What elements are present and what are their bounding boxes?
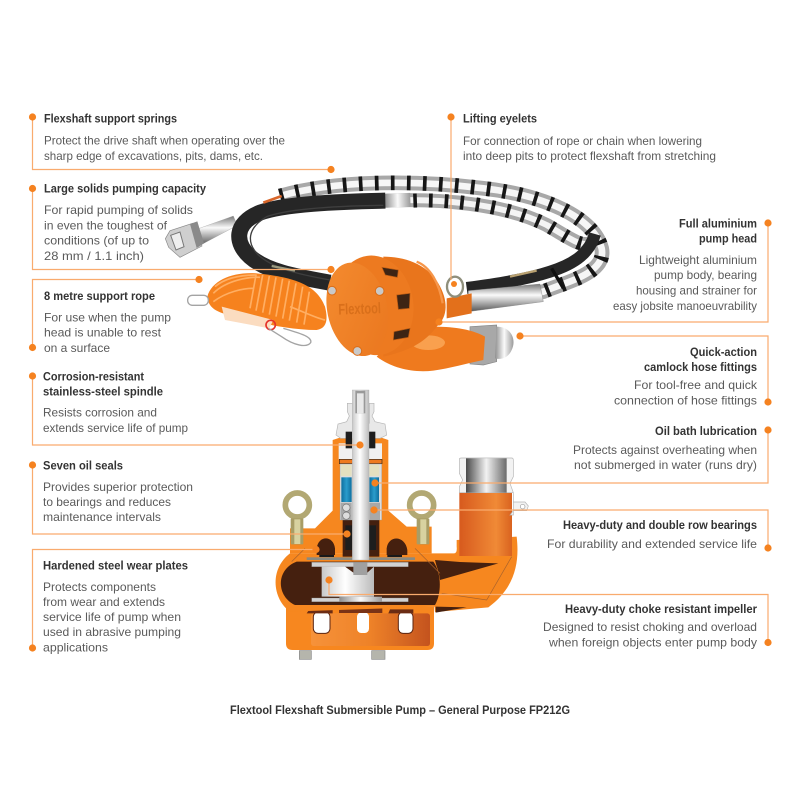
callout: Flexshaft support springs: sharp edge of excavations, pits, dams, etc. xyxy=(44,149,263,163)
callout: Oil bath lubrication: not submerged in water (runs dry) xyxy=(574,458,757,472)
callout: Full aluminium pump head: Full aluminium xyxy=(679,218,757,230)
callout: 8 metre support rope: For use when the pump xyxy=(44,310,171,324)
callout: 8 metre support rope: 8 metre support rope xyxy=(44,291,155,303)
callout: Corrosion-resistant stainless-steel spindle: extends service life of pump xyxy=(43,421,188,435)
elbow and camlock outlet xyxy=(377,325,514,371)
discharge elbow xyxy=(430,493,517,613)
callout: Quick-action camlock hose fittings: For tool-free and quick xyxy=(634,378,758,392)
callout: Large solids pumping capacity: 28 mm / 1.1 inch) xyxy=(44,249,144,263)
callout: Flexshaft support springs: Protect the drive shaft when operating over the xyxy=(44,134,285,148)
callout: 8 metre support rope: head is unable to rest xyxy=(44,326,162,340)
oil chambers xyxy=(292,520,440,573)
callout: Seven oil seals xyxy=(29,460,351,538)
callout: Hardened steel wear plates xyxy=(29,546,320,654)
callout: Quick-action camlock hose fittings xyxy=(516,332,772,408)
impeller and wear plates xyxy=(312,562,408,602)
callout: Quick-action camlock hose fittings: connection of hose fittings xyxy=(614,394,757,408)
callout: Heavy-duty choke resistant impeller xyxy=(325,576,772,650)
bearing housing xyxy=(339,443,382,520)
callout: 8 metre support rope: on a surface xyxy=(44,341,110,355)
callout: Full aluminium pump head: pump body, bearing xyxy=(654,268,757,282)
callout: Corrosion-resistant stainless-steel spindle: Corrosion-resistant xyxy=(43,372,144,384)
callout: Hardened steel wear plates: Hardened steel wear plates xyxy=(43,560,188,572)
callout: 8 metre support rope xyxy=(29,276,203,355)
support rope coil xyxy=(207,273,327,330)
flexshaft hex end connector xyxy=(165,216,237,257)
black hose xyxy=(239,196,595,288)
callout: Corrosion-resistant stainless-steel spindle xyxy=(29,372,364,449)
callout: Lifting eyelets xyxy=(447,113,716,280)
base with strainer xyxy=(286,604,434,659)
callout: Large solids pumping capacity: Large solids pumping capacity xyxy=(44,184,207,196)
callout: Heavy-duty and double row bearings: For durability and extended service life xyxy=(547,537,757,551)
callout: Corrosion-resistant stainless-steel spindle: Resists corrosion and xyxy=(43,406,157,420)
callout: Seven oil seals: maintenance intervals xyxy=(43,510,161,524)
callout: Heavy-duty choke resistant impeller: when foreign objects enter pump body xyxy=(548,636,757,650)
callout: Flexshaft support springs: Flexshaft support springs xyxy=(44,114,177,126)
callout: Corrosion-resistant stainless-steel spindle: stainless-steel spindle xyxy=(43,386,163,398)
callout: Full aluminium pump head: Lightweight aluminium xyxy=(639,253,757,267)
callout: Oil bath lubrication xyxy=(371,426,772,487)
right eyelet xyxy=(410,493,434,544)
callout: Heavy-duty and double row bearings: Heavy-duty and double row bearings xyxy=(563,520,757,532)
callout: Oil bath lubrication: Oil bath lubrication xyxy=(655,426,757,438)
callout: Hardened steel wear plates: service life of pump when xyxy=(43,610,181,624)
camlock fitting xyxy=(459,458,528,515)
callout: Hardened steel wear plates: from wear and extends xyxy=(43,595,165,609)
pump housing xyxy=(276,437,440,612)
pump body xyxy=(383,257,472,357)
callout: Seven oil seals: Seven oil seals xyxy=(43,460,123,472)
volute chamber xyxy=(281,562,440,605)
carabiner clips xyxy=(188,295,311,345)
hose ferrule xyxy=(468,284,543,312)
callout: Heavy-duty and double row bearings xyxy=(370,506,772,552)
spindle xyxy=(352,390,369,560)
callout: Seven oil seals: Provides superior protection xyxy=(43,480,193,494)
front steel spring xyxy=(385,193,590,244)
callout: Large solids pumping capacity: conditions (of up to xyxy=(44,234,149,248)
callout: Lifting eyelets: For connection of rope or chain when lowering xyxy=(463,134,702,148)
left eyelet xyxy=(285,493,309,544)
rear steel spring xyxy=(280,183,602,302)
top cap xyxy=(336,403,387,438)
caption: Flextool Flexshaft Submersible Pump – General Purpose FP212G xyxy=(230,705,570,717)
callout: Full aluminium pump head: easy jobsite manoeuvrability xyxy=(613,299,757,313)
callout: Quick-action camlock hose fittings: camlock hose fittings xyxy=(644,362,757,374)
callout: Large solids pumping capacity: For rapid pumping of solids xyxy=(44,203,193,217)
oil seals xyxy=(345,432,376,550)
lifting eyelet xyxy=(447,277,463,297)
callout: Large solids pumping capacity xyxy=(29,184,335,273)
callout: Hardened steel wear plates: used in abrasive pumping xyxy=(43,625,181,639)
callout: Heavy-duty choke resistant impeller: Heavy-duty choke resistant impeller xyxy=(565,604,758,616)
pump photograph xyxy=(165,183,602,371)
callout: Oil bath lubrication: Protects against overheating when xyxy=(573,443,757,457)
callout: Flexshaft support springs xyxy=(29,113,335,173)
pump strainer disc xyxy=(318,250,420,362)
callout: Large solids pumping capacity: in even the toughest of xyxy=(44,218,168,232)
callout: Full aluminium pump head xyxy=(435,218,772,326)
cutaway pump diagram xyxy=(276,390,528,659)
callout: Heavy-duty choke resistant impeller: Designed to resist choking and overload xyxy=(543,620,757,634)
callout: Quick-action camlock hose fittings: Quick-action xyxy=(690,347,757,359)
callout: Lifting eyelets: Lifting eyelets xyxy=(463,114,537,126)
callout: Hardened steel wear plates: Protects components xyxy=(43,580,156,594)
embossed brand name: Flextool xyxy=(338,300,381,319)
callout: Full aluminium pump head: housing and strainer for xyxy=(636,284,757,298)
callout: Full aluminium pump head: pump head xyxy=(699,234,757,246)
callout: Seven oil seals: to bearings and reduces xyxy=(43,495,171,509)
callout: Lifting eyelets: into deep pits to protect flexshaft from stretching xyxy=(463,149,716,163)
callout: Hardened steel wear plates: applications xyxy=(43,640,108,654)
